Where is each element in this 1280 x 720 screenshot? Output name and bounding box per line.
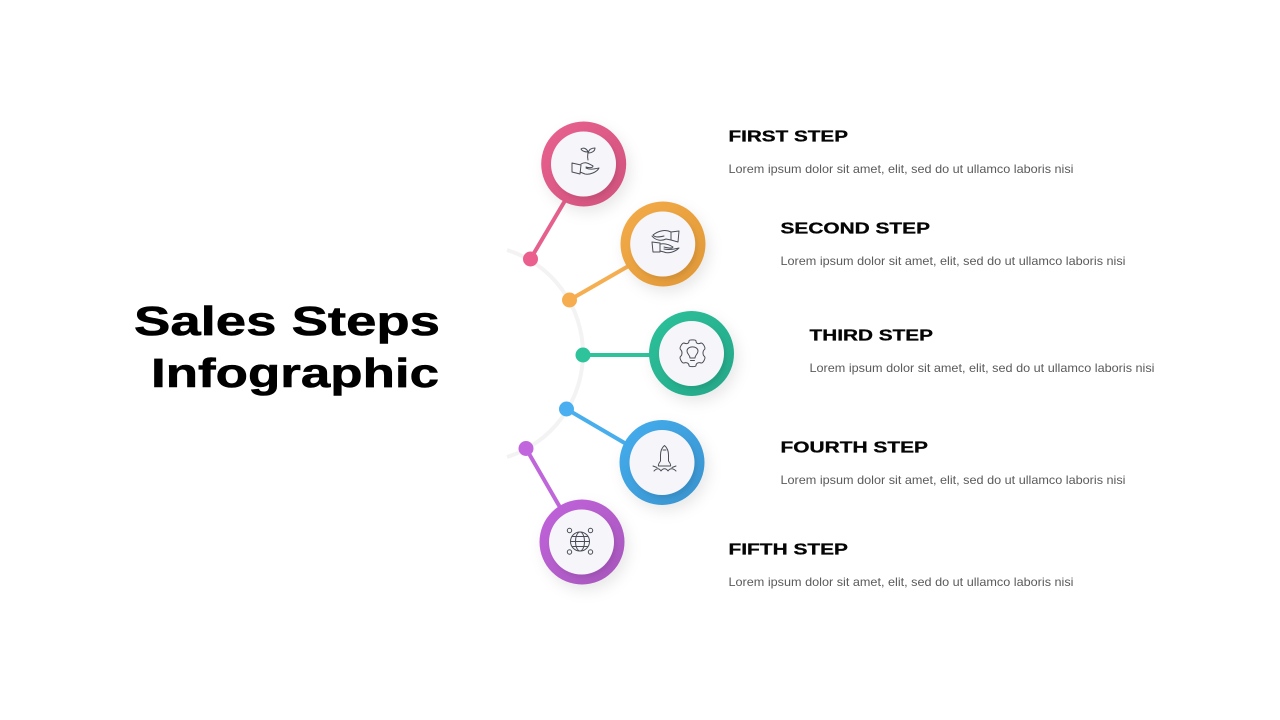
text block: second step: SECOND STEP	[780, 220, 930, 238]
text block: fourth step	[780, 440, 1126, 487]
text block: second step	[780, 220, 1126, 268]
icon: gear with light bulb	[680, 340, 705, 367]
text block: third step: THIRD STEP	[810, 328, 933, 344]
text block: fifth step: Lorem ipsum dolor sit amet, elit, sed do ut ullamco laboris nisi	[728, 575, 1074, 589]
step 5: fifth step node	[518, 441, 624, 584]
step 4: fourth step node	[559, 402, 704, 505]
icon: hand holding sprout	[572, 148, 599, 174]
step 1: first step node	[523, 122, 626, 266]
title: Infographic	[151, 350, 439, 396]
text block: first step	[728, 128, 1074, 176]
step 3: third step node	[576, 311, 734, 396]
text block: fourth step: FOURTH STEP	[780, 440, 928, 456]
title	[134, 298, 440, 396]
text block: fourth step: Lorem ipsum dolor sit amet, elit, sed do ut ullamco laboris nisi	[780, 473, 1126, 487]
icon: two open hands	[652, 231, 679, 253]
text block: first step: FIRST STEP	[728, 128, 848, 146]
text block: first step: Lorem ipsum dolor sit amet, elit, sed do ut ullamco laboris nisi	[728, 162, 1074, 176]
text block: third step: Lorem ipsum dolor sit amet, elit, sed do ut ullamco laboris nisi	[810, 361, 1154, 375]
text block: fifth step	[728, 542, 1074, 589]
title: Sales Steps	[134, 298, 440, 344]
text block: second step: Lorem ipsum dolor sit amet, elit, sed do ut ullamco laboris nisi	[780, 254, 1126, 268]
icon: globe network	[567, 528, 593, 554]
text block: third step	[810, 328, 1154, 375]
icon: rocket launch	[653, 446, 676, 471]
curved spine arc	[507, 250, 583, 457]
step 2: second step node	[562, 202, 706, 308]
text block: fifth step: FIFTH STEP	[728, 542, 848, 558]
